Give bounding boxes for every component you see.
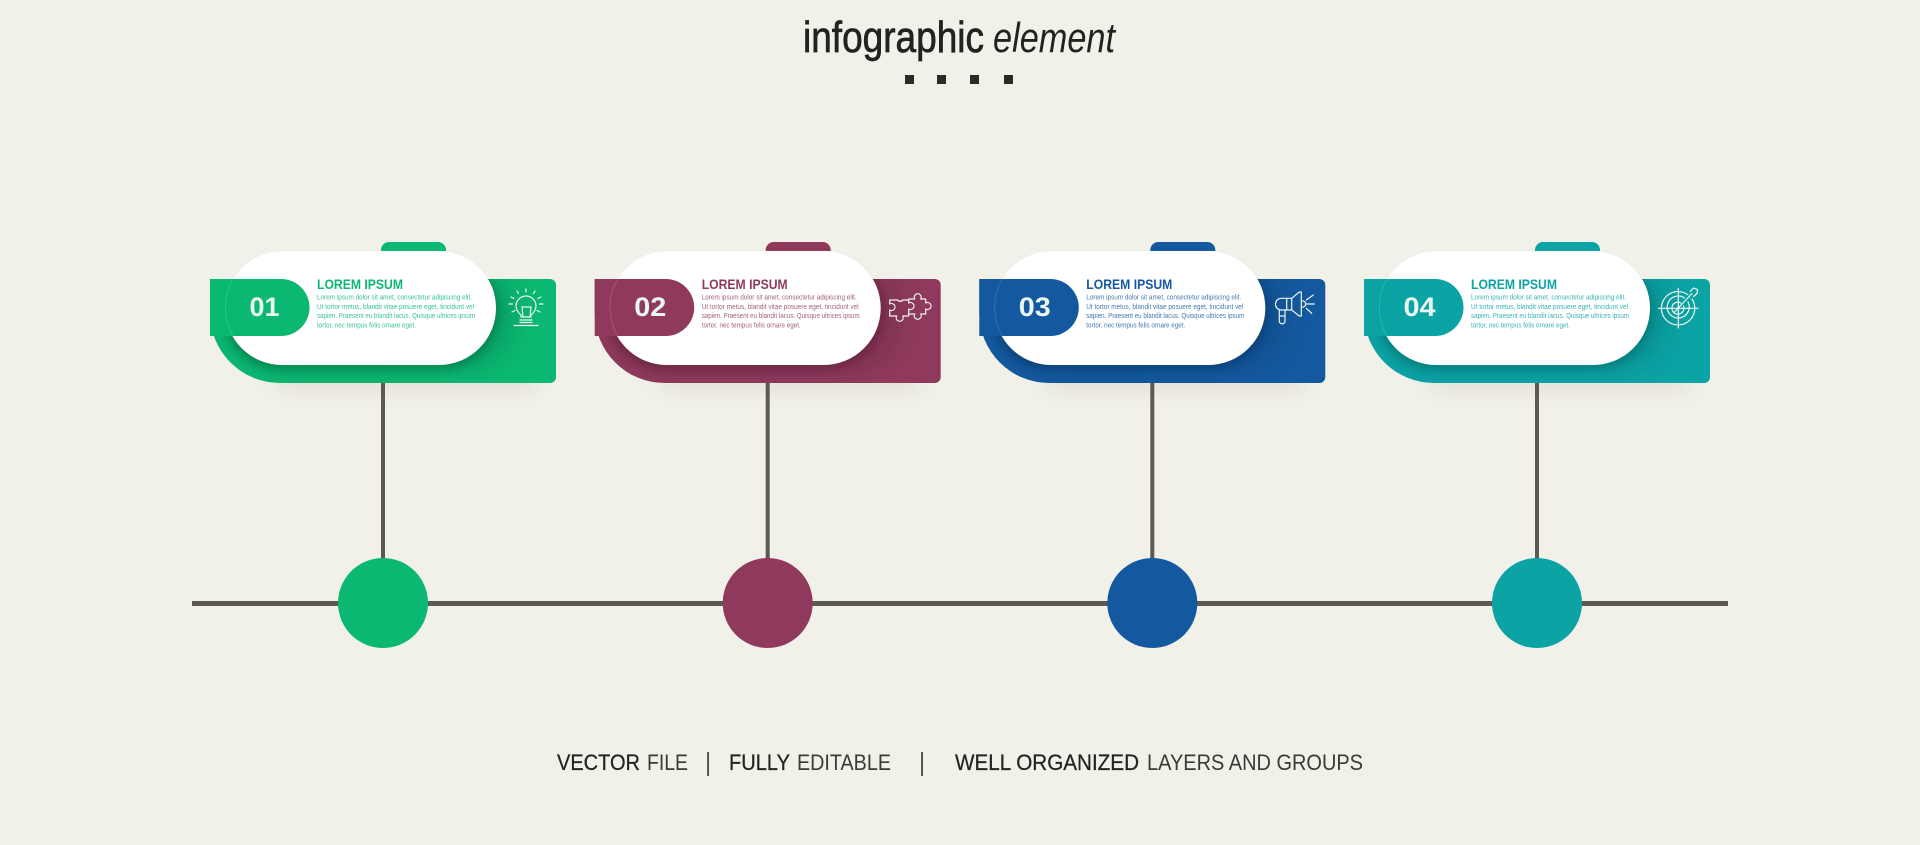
- number badge: [595, 279, 694, 336]
- number badge: [210, 279, 310, 336]
- card body: [979, 279, 1325, 383]
- footer text: [557, 750, 1363, 776]
- white pill: [1379, 251, 1650, 365]
- tab: [1535, 242, 1600, 251]
- heading: LOREM IPSUM: [702, 276, 788, 292]
- infographic canvas: [192, 20, 1728, 776]
- pill edge on badge: [610, 279, 618, 336]
- body text: [1471, 292, 1629, 330]
- title: [803, 13, 1117, 62]
- body text: Lorem ipsum dolor sit amet, consectetur adipiscing elit.: [317, 292, 472, 302]
- tab: [766, 242, 831, 251]
- card body shadow: [1419, 372, 1689, 390]
- connector line 01: [381, 383, 385, 559]
- pill shadow: [222, 279, 518, 377]
- title dots: [905, 75, 1013, 84]
- panel: step 04: [1364, 242, 1710, 648]
- footer: fully editable: FULLY: [729, 750, 790, 775]
- footer: well organized layers and groups: [955, 750, 1363, 775]
- connector line 03: [1150, 383, 1154, 559]
- card body: [210, 279, 556, 383]
- pill edge on badge: [225, 279, 233, 336]
- white pill: [610, 251, 881, 365]
- body text: sapien. Praesent eu blandit lacus. Quisque ultrices ipsum: [1471, 311, 1629, 320]
- heading: LOREM IPSUM: [1471, 276, 1557, 292]
- title word: element: element: [993, 14, 1117, 61]
- body text: tortor, nec tempus felis ornare eget.: [1086, 321, 1185, 330]
- number badge: [979, 279, 1079, 336]
- body text: Ut tortor metus, blandit vitae posuere eget, tincidunt vel: [702, 302, 859, 311]
- card body: [1364, 279, 1710, 383]
- white pill: [994, 251, 1265, 365]
- footer separator 1: [707, 752, 709, 776]
- card body: [595, 279, 941, 383]
- icon: puzzle pieces: [890, 294, 931, 321]
- card body shadow: [650, 372, 920, 390]
- body text: tortor, nec tempus felis ornare eget.: [702, 321, 801, 330]
- body text: sapien. Praesent eu blandit lacus. Quisque ultrices ipsum: [702, 311, 860, 320]
- icon: megaphone: [1275, 292, 1314, 324]
- panel: step 03: [979, 242, 1325, 648]
- footer: fully editable: [729, 750, 891, 775]
- icon: target: [1658, 288, 1698, 328]
- footer: vector file: FILE: [647, 750, 688, 775]
- number badge: [1364, 279, 1464, 336]
- pill edge on badge: [1379, 279, 1387, 336]
- body text: Ut tortor metus, blandit vitae posuere eget, tincidunt vel: [317, 302, 474, 311]
- footer: well organized layers and groups: LAYERS AND GROUPS: [1147, 750, 1363, 775]
- pill shadow: [1378, 279, 1670, 376]
- body text: Ut tortor metus, blandit vitae posuere eget, tincidunt vel: [1471, 302, 1628, 311]
- body text: Lorem ipsum dolor sit amet, consectetur adipiscing elit.: [702, 292, 857, 302]
- number: 04: [1404, 292, 1436, 322]
- footer: vector file: VECTOR: [557, 750, 640, 775]
- white pill: [225, 251, 496, 365]
- body text: sapien. Praesent eu blandit lacus. Quisque ultrices ipsum: [317, 311, 475, 320]
- panel: step 01: [210, 242, 556, 648]
- number: 01: [250, 292, 280, 322]
- footer: vector file: [557, 750, 688, 775]
- connector line 02: [766, 383, 770, 559]
- card body shadow: [1034, 372, 1304, 390]
- timeline node 03: [1107, 558, 1197, 648]
- timeline node 04: [1492, 558, 1582, 648]
- body text: Lorem ipsum dolor sit amet, consectetur adipiscing elit.: [1086, 292, 1241, 302]
- body text: tortor, nec tempus felis ornare eget.: [1471, 321, 1570, 330]
- panel: step 02: [595, 242, 941, 648]
- pill shadow: [608, 279, 900, 376]
- footer: well organized layers and groups: WELL ORGANIZED: [955, 750, 1139, 775]
- pill shadow: [993, 279, 1285, 376]
- icon: light bulb: [509, 289, 543, 326]
- timeline node 02: [723, 558, 813, 648]
- body text: [317, 292, 475, 330]
- tab: [381, 242, 446, 251]
- number: 02: [634, 292, 666, 322]
- tab: [1150, 242, 1215, 251]
- body text: Ut tortor metus, blandit vitae posuere eget, tincidunt vel: [1086, 302, 1244, 311]
- body text: Lorem ipsum dolor sit amet, consectetur adipiscing elit.: [1471, 292, 1626, 302]
- pill edge on badge: [995, 279, 1002, 336]
- title word: infographic: infographic: [803, 13, 984, 62]
- body text: sapien. Praesent eu blandit lacus. Quisque ultrices ipsum: [1086, 311, 1244, 320]
- card body shadow: [265, 372, 535, 390]
- timeline node 01: [338, 558, 428, 648]
- footer: fully editable: EDITABLE: [797, 750, 891, 775]
- footer separator 2: [921, 752, 923, 776]
- body text: [702, 292, 860, 330]
- heading: LOREM IPSUM: [1086, 276, 1172, 292]
- body text: tortor, nec tempus felis ornare eget.: [317, 321, 416, 330]
- heading: LOREM IPSUM: [317, 276, 403, 292]
- body text: [1086, 292, 1244, 330]
- connector line 04: [1535, 383, 1539, 559]
- number: 03: [1019, 292, 1051, 322]
- timeline axis: [192, 601, 1728, 606]
